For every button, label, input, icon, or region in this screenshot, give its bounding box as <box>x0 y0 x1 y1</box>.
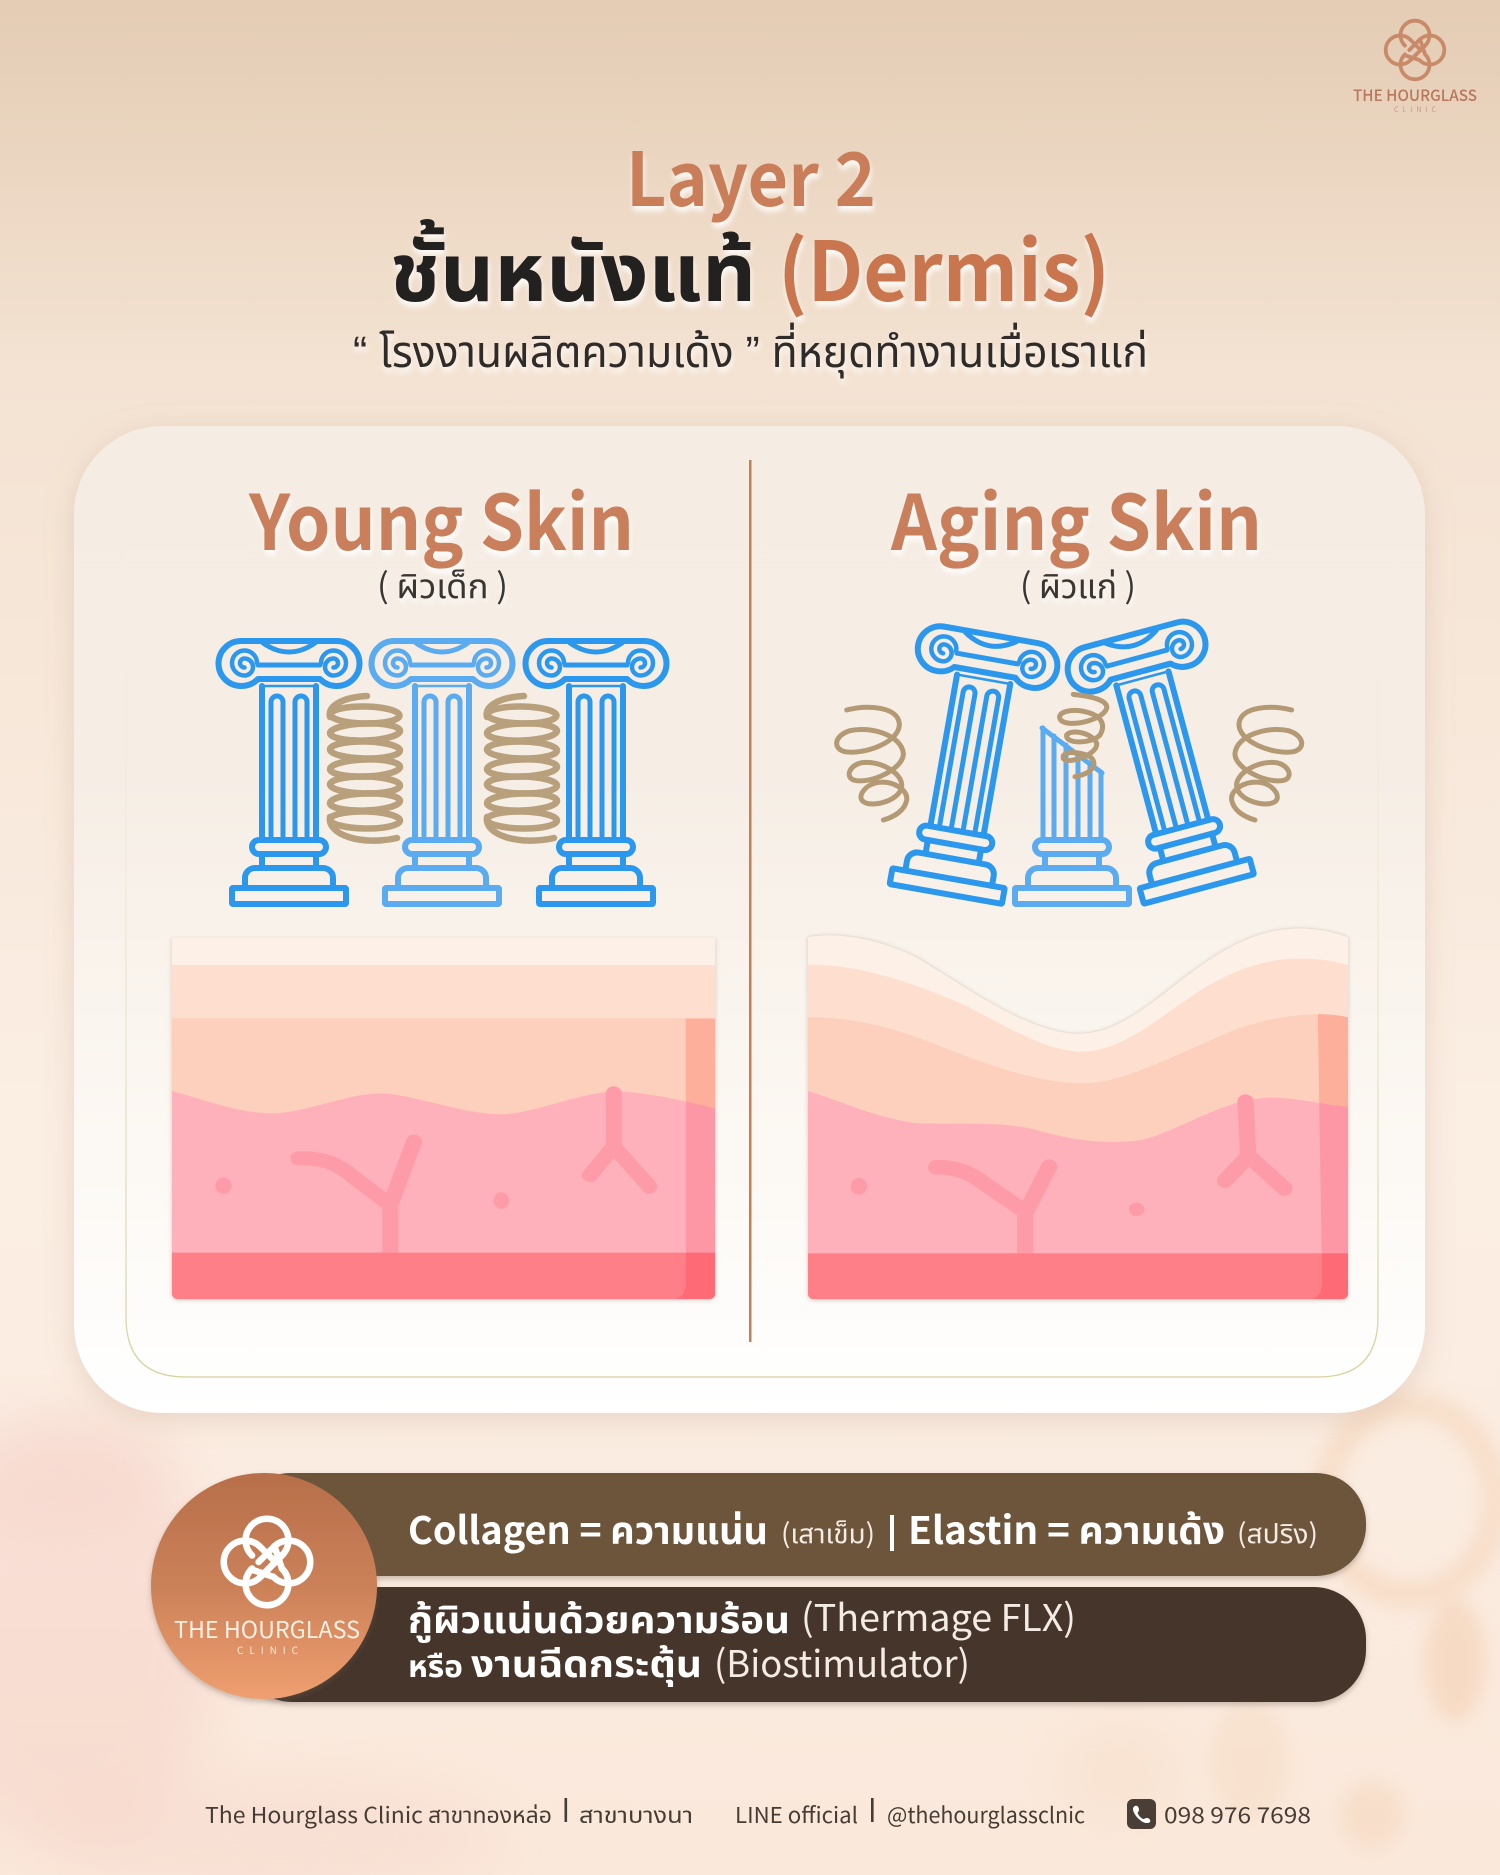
text: line handle: @thehourglassclnic <box>887 1798 1085 1830</box>
subtitle: “ โรงงานผลิตความเด้ง ” ที่หยุดทำงานเมื่อเราแก่ <box>353 316 1148 380</box>
text: biostimulator: (Biostimulator) <box>714 1634 970 1688</box>
panel: aging skin heading: ( ผิวแก่ ) <box>1020 559 1136 608</box>
divider <box>871 1798 874 1822</box>
icon: tilted left pillar <box>876 623 1061 906</box>
text: branch two: สาขาบางนา <box>579 1798 693 1830</box>
text: phone number: 098 976 7698 <box>1164 1798 1311 1830</box>
footer contact <box>205 1798 1311 1830</box>
heading: dermis latin: (Dermis) <box>778 206 1110 325</box>
illustration: young pillars and springs <box>218 641 666 904</box>
heading: dermis: ชั้นหนังแท้ <box>390 206 756 325</box>
callout: collagen and elastin bar <box>240 1473 1366 1576</box>
divider <box>564 1798 567 1822</box>
text: biostimulator bold: งานฉีดกระตุ้น <box>471 1634 702 1688</box>
logo: top right <box>1353 21 1477 115</box>
text: collagen: Collagen = ความแน่น <box>408 1500 768 1555</box>
illustration: aging pillars and springs <box>837 617 1302 907</box>
divider bar <box>890 1515 894 1551</box>
text: thermage bold: กู้ผิวแน่นด้วยความร้อน <box>408 1590 790 1644</box>
text: thermage: (Thermage FLX) <box>801 1588 1076 1642</box>
icon: broken pillar <box>1015 728 1129 904</box>
title <box>353 121 1148 380</box>
logo: top right: THE HOURGLASS <box>1353 84 1477 106</box>
illustration: aging skin layers <box>808 923 1349 1300</box>
illustration: young skin layers <box>172 937 716 1299</box>
heading: layer 2: Layer 2 <box>626 121 876 228</box>
text: line label: LINE official <box>735 1798 858 1830</box>
logo badge <box>151 1473 377 1699</box>
panel: young skin heading: ( ผิวเด็ก ) <box>377 559 508 608</box>
icon: phone <box>1127 1799 1156 1829</box>
text: pile note: (เสาเข็ม) <box>781 1512 875 1551</box>
logo: top right: CLINIC <box>1394 105 1437 115</box>
text: branches: The Hourglass Clinic สาขาทองหล่อ <box>205 1798 552 1830</box>
icon: loose springs <box>837 694 1302 820</box>
logo badge: THE HOURGLASS <box>174 1611 360 1645</box>
logo badge: CLINIC <box>237 1642 299 1657</box>
panel: young skin heading: Young Skin <box>248 462 634 572</box>
text: elastin: Elastin = ความเด้ง <box>908 1500 1225 1555</box>
text: or: หรือ <box>408 1642 463 1686</box>
panel: comparison card <box>74 426 1425 1413</box>
text: spring note: (สปริง) <box>1237 1512 1318 1551</box>
icon: tilted right pillar <box>1063 617 1267 907</box>
callout: treatment bar <box>240 1587 1366 1702</box>
panel: aging skin heading: Aging Skin <box>890 462 1262 572</box>
